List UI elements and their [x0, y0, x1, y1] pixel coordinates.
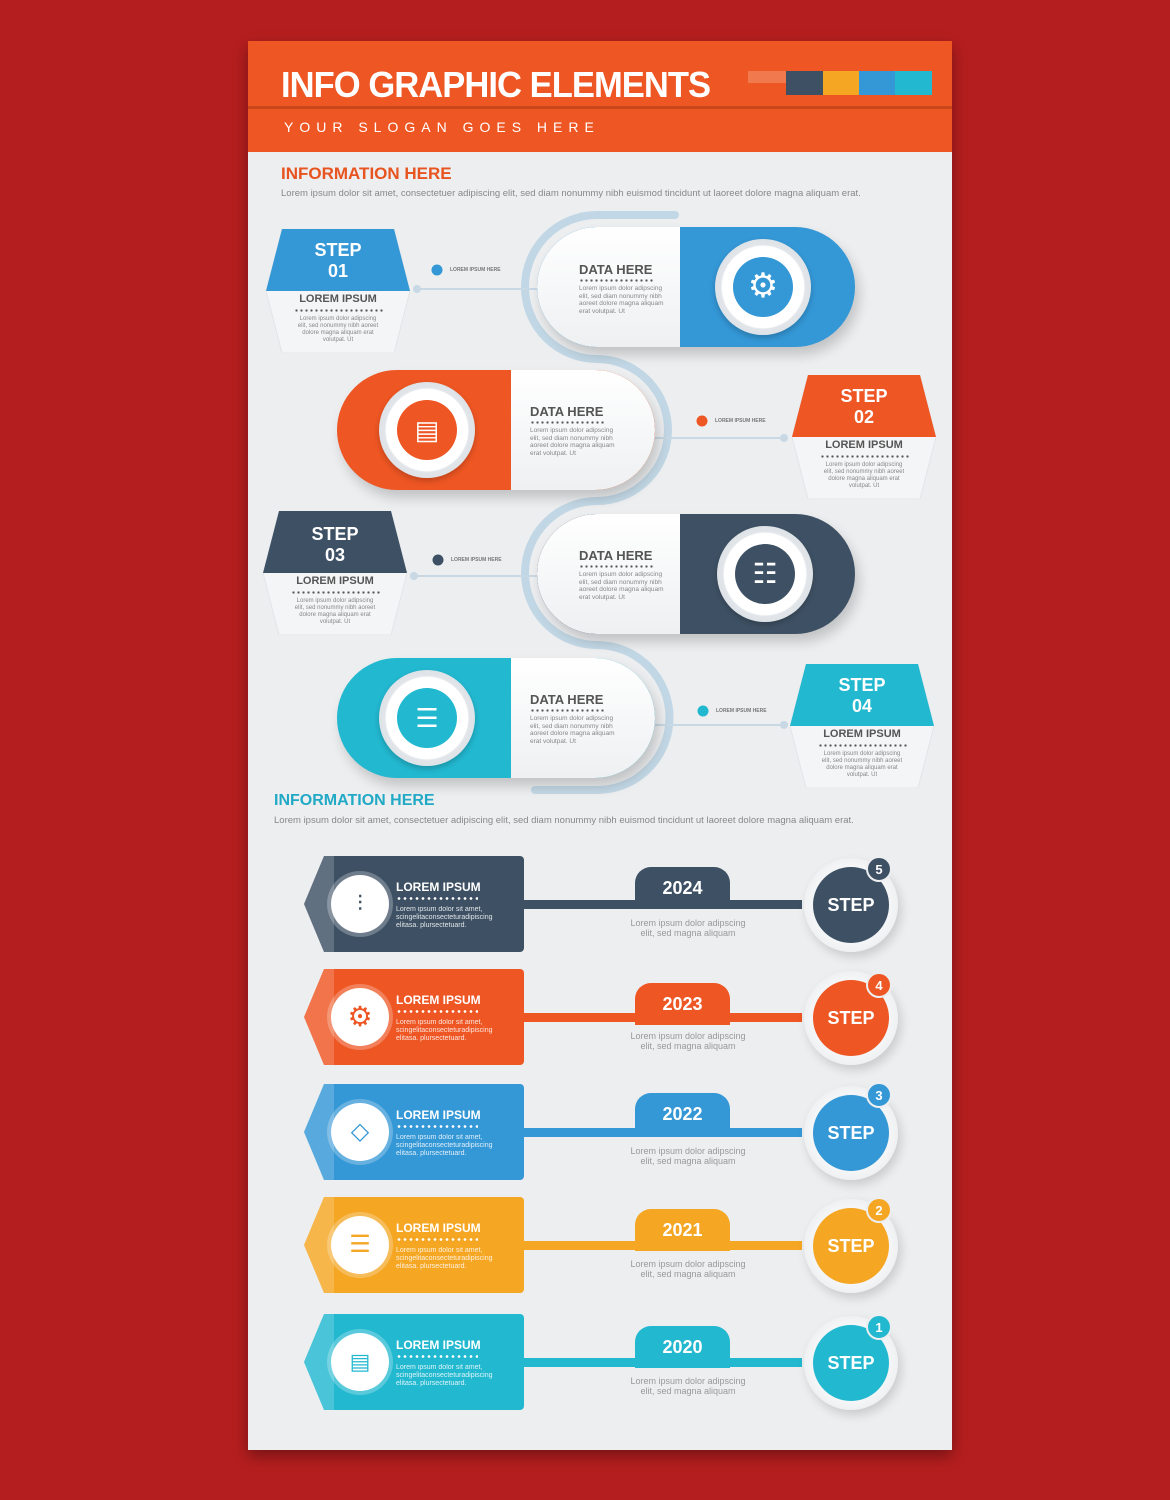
connector labels: LOREM IPSUM HERE [450, 267, 501, 273]
timeline row 2020: ▤ [350, 1349, 370, 1374]
hexagon step 01: LOREM IPSUM [299, 293, 377, 305]
timeline row 2022: LOREM IPSUM [396, 1108, 481, 1122]
timeline row 2020: LOREM IPSUM [396, 1338, 481, 1352]
hexagon step 03 [263, 511, 407, 635]
pill 3: DATA HERE [579, 548, 652, 563]
pill 3 [537, 514, 855, 634]
timeline row 2024: Lorem ipsum dolor sit amet, [396, 906, 482, 913]
pill 4: ☰ [415, 703, 439, 733]
heading: information here 2: INFORMATION HERE [274, 792, 435, 809]
heading: information here 1: INFORMATION HERE [281, 164, 452, 183]
timeline row 2023: STEP [827, 1008, 874, 1028]
hexagon step 03: STEP [311, 524, 358, 544]
pill 1: Lorem ipsum dolor adipscing elit, sed diam nonummy nibh aoreet dolore magna aliquam erat volutpat. Ut [579, 285, 664, 314]
hexagon step 04: 04 [852, 696, 872, 716]
hexagon step 04 [790, 664, 934, 788]
timeline row 2024: Lorem ipsum dolor adipscing [630, 918, 746, 928]
text block 2: Lorem ipsum dolor sit amet, consectetuer adipiscing elit, sed diam nonummy nibh euismod tincidunt ut laoreet dolore magna aliquam erat. [274, 815, 854, 826]
hexagon step 02: STEP [840, 386, 888, 406]
timeline row 2021: elitasa. plursectetuard. [396, 1263, 466, 1270]
timeline row 2021: elit, sed magna aliquam [640, 1269, 736, 1279]
text: LOREM IPSUM HERE [715, 418, 766, 424]
title: INFO GRAPHIC ELEMENTS [281, 64, 710, 105]
timeline row 2024: ⫶ [357, 891, 363, 916]
timeline row 2022: Lorem ipsum dolor sit amet, [396, 1134, 482, 1141]
hexagon step 03: LOREM IPSUM [296, 575, 374, 587]
timeline row 2020: Lorem ipsum dolor sit amet, [396, 1364, 482, 1371]
pill 3: Lorem ipsum dolor adipscing elit, sed diam nonummy nibh aoreet dolore magna aliquam erat volutpat. Ut [579, 571, 664, 600]
hexagon step 04: LOREM IPSUM [823, 728, 901, 740]
hexagon step 04: STEP [838, 675, 886, 695]
timeline row 2022 [304, 1084, 904, 1188]
timeline row 2023: 4 [875, 978, 883, 993]
hexagon step 02: Lorem ipsum dolor adipscing elit, sed nonummy nibh aoreet dolore magna aliquam erat volutpat. Ut [824, 462, 904, 489]
hexagon step 01: 01 [328, 261, 348, 281]
timeline row 2024: 2024 [662, 878, 703, 898]
pill 1 [537, 227, 855, 347]
timeline row 2023: elit, sed magna aliquam [640, 1041, 736, 1051]
panel: page [248, 41, 952, 1450]
timeline row 2024: elitasa. plursectetuard. [396, 922, 466, 929]
hexagon step 01: STEP [314, 240, 362, 260]
timeline row 2023: Lorem ipsum dolor adipscing [630, 1031, 746, 1041]
timeline row 2023: Lorem ipsum dolor sit amet, [396, 1019, 482, 1026]
timeline row 2023: scingelitaconsecteturadipiscing [396, 1027, 492, 1034]
pill 2: Lorem ipsum dolor adipscing elit, sed diam nonummy nibh aoreet dolore magna aliquam erat volutpat. Ut [530, 427, 615, 456]
slogan: YOUR SLOGAN GOES HERE [284, 119, 600, 135]
timeline row 2020 [304, 1314, 904, 1418]
timeline row 2022: STEP [827, 1123, 874, 1143]
pill 2: DATA HERE [530, 404, 603, 419]
hexagon step 02 [792, 375, 936, 499]
timeline row 2022: scingelitaconsecteturadipiscing [396, 1142, 492, 1149]
timeline row 2021: Lorem ipsum dolor sit amet, [396, 1247, 482, 1254]
pill 2 [337, 370, 655, 490]
timeline row 2020: elit, sed magna aliquam [640, 1386, 736, 1396]
timeline row 2021 [304, 1197, 904, 1302]
timeline row 2024 [304, 856, 904, 960]
hexagon step 03: 03 [325, 545, 345, 565]
timeline row 2021: 2021 [662, 1220, 703, 1240]
pill 1: ⚙ [748, 267, 778, 305]
text block 1: Lorem ipsum dolor sit amet, consectetuer adipiscing elit, sed diam nonummy nibh euismod tincidunt ut laoreet dolore magna aliquam erat. [281, 188, 861, 199]
timeline row 2023: ⚙ [347, 1001, 373, 1032]
timeline row 2021: Lorem ipsum dolor adipscing [630, 1259, 746, 1269]
timeline row 2020: 2020 [662, 1337, 703, 1357]
hexagon step 02: 02 [854, 407, 874, 427]
pill 4: DATA HERE [530, 692, 603, 707]
hexagon step 03: Lorem ipsum dolor adipscing elit, sed nonummy nibh aoreet dolore magna aliquam erat volutpat. Ut [295, 598, 375, 625]
timeline row 2024: scingelitaconsecteturadipiscing [396, 914, 492, 921]
timeline row 2021: scingelitaconsecteturadipiscing [396, 1255, 492, 1262]
hexagon step 01 [266, 229, 410, 353]
timeline row 2020: scingelitaconsecteturadipiscing [396, 1372, 492, 1379]
pill 3: ☷ [752, 558, 778, 589]
hexagon step 01: Lorem ipsum dolor adipscing elit, sed nonummy nibh aoreet dolore magna aliquam erat volutpat. Ut [298, 316, 378, 343]
timeline row 2022: elit, sed magna aliquam [640, 1156, 736, 1166]
timeline row 2024: STEP [827, 895, 874, 915]
timeline row 2024: elit, sed magna aliquam [640, 928, 736, 938]
timeline row 2020: 1 [875, 1320, 883, 1335]
timeline row 2020: STEP [827, 1353, 874, 1373]
timeline row 2022: 2022 [662, 1104, 703, 1124]
timeline row 2023: LOREM IPSUM [396, 993, 481, 1007]
pill 1: DATA HERE [579, 262, 652, 277]
pill 2: ▤ [415, 415, 439, 445]
timeline row 2024: LOREM IPSUM [396, 880, 481, 894]
timeline row 2023 [304, 969, 904, 1074]
timeline row 2022: 3 [875, 1088, 883, 1103]
timeline row 2021: STEP [827, 1236, 874, 1256]
timeline row 2021: ☰ [349, 1231, 371, 1258]
timeline row 2023: 2023 [662, 994, 703, 1014]
pill 4: Lorem ipsum dolor adipscing elit, sed diam nonummy nibh aoreet dolore magna aliquam erat volutpat. Ut [530, 715, 615, 744]
timeline row 2021: 2 [875, 1203, 883, 1218]
text: LOREM IPSUM HERE [716, 708, 767, 714]
timeline row 2022: ◇ [351, 1118, 369, 1145]
hexagon step 02: LOREM IPSUM [825, 439, 903, 451]
timeline row 2020: Lorem ipsum dolor adipscing [630, 1376, 746, 1386]
timeline row 2020: elitasa. plursectetuard. [396, 1380, 466, 1387]
timeline row 2024: 5 [875, 862, 883, 877]
pill 4 [337, 658, 655, 778]
hexagon step 04: Lorem ipsum dolor adipscing elit, sed nonummy nibh aoreet dolore magna aliquam erat volutpat. Ut [822, 751, 902, 778]
timeline row 2023: elitasa. plursectetuard. [396, 1035, 466, 1042]
timeline row 2021: LOREM IPSUM [396, 1221, 481, 1235]
color swatches [748, 71, 932, 95]
timeline row 2022: Lorem ipsum dolor adipscing [630, 1146, 746, 1156]
timeline row 2022: elitasa. plursectetuard. [396, 1150, 466, 1157]
text: LOREM IPSUM HERE [451, 557, 502, 563]
header band [248, 41, 952, 152]
